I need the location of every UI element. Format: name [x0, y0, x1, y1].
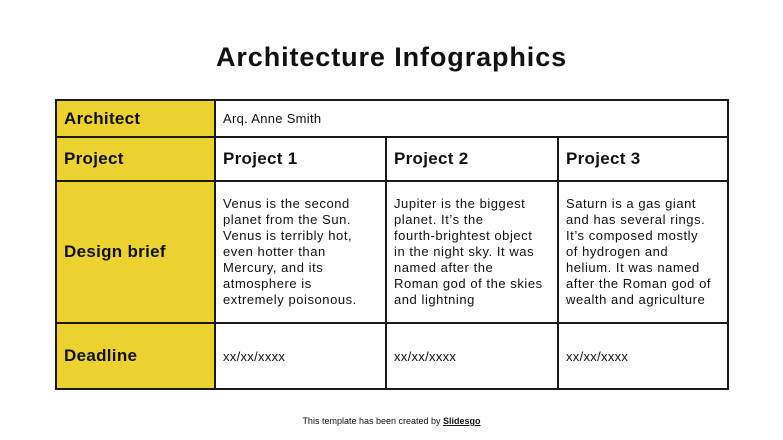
table: after the Roman god of: [566, 276, 711, 291]
table: and has several rings.: [566, 212, 705, 227]
table: atmosphere is: [223, 276, 312, 291]
table: planet. It’s the: [394, 212, 484, 227]
table: Venus is terribly hot,: [223, 228, 352, 243]
table: helium. It was named: [566, 260, 700, 275]
footer: This template has been created by Slidesgo: [302, 416, 481, 426]
table: and lightning: [394, 292, 475, 307]
table: in the night sky. It was: [394, 244, 534, 259]
table: Roman god of the skies: [394, 276, 543, 291]
table: Project 1: [223, 149, 298, 168]
table: named after the: [394, 260, 493, 275]
table: Arq. Anne Smith: [223, 111, 321, 126]
table: Deadline: [64, 346, 137, 365]
table: planet from the Sun.: [223, 212, 351, 227]
table: Saturn is a gas giant: [566, 196, 696, 211]
table: fourth-brightest object: [394, 228, 532, 243]
table: Mercury, and its: [223, 260, 323, 275]
table: [55, 99, 729, 390]
table: It’s composed mostly: [566, 228, 698, 243]
table: wealth and agriculture: [566, 292, 705, 307]
table: xx/xx/xxxx: [223, 348, 285, 364]
table: Project 2: [394, 149, 469, 168]
table: Venus is the second: [223, 196, 350, 211]
table: even hotter than: [223, 244, 326, 259]
table: Architect: [64, 108, 140, 128]
title: Architecture Infographics: [216, 42, 567, 72]
table: Project 3: [566, 149, 641, 168]
table: extremely poisonous.: [223, 292, 357, 307]
table: Design brief: [64, 242, 166, 261]
table: xx/xx/xxxx: [394, 348, 456, 364]
table: Project: [64, 149, 124, 168]
table: xx/xx/xxxx: [566, 348, 628, 364]
table: Jupiter is the biggest: [394, 196, 525, 211]
table: of hydrogen and: [566, 244, 668, 259]
